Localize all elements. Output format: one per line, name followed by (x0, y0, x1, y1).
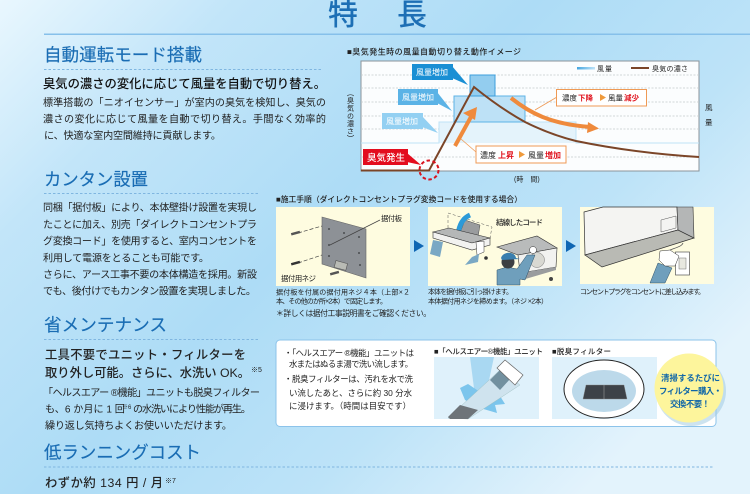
text block: easy maintenance: も、6 か月に 1 回 (45, 404, 125, 416)
text block: easy installation: グ変換コード」を使用すると、室内コンセントを (43, 234, 257, 248)
step arrow (414, 240, 424, 252)
text block: easy installation: でも、後付けでもカンタン設置を実現しました。 (43, 284, 256, 298)
label: concentration rises: 風量 (528, 151, 544, 160)
text block: auto mode: 標準搭載の「ニオイセンサー」が室内の臭気を検知し、臭気の (43, 96, 326, 109)
step 1 illustration (276, 207, 410, 286)
callout: no replacement: 交換不要！ (670, 399, 710, 409)
filter illustration (552, 346, 657, 419)
axis label: left: (臭気の濃さ) (346, 94, 354, 138)
panel text: 水またはぬるま湯で洗い流します。 (289, 359, 413, 369)
label: airflow up 2: 風量増加 (402, 92, 434, 102)
axis label: right: 風 (705, 103, 713, 112)
step 2 caption (428, 287, 548, 306)
title (44, 0, 750, 35)
panel text: に浸けます。（時間は目安です） (289, 401, 411, 411)
text block: easy maintenance: の水洗いにより性能が再生。 (133, 402, 251, 416)
step 1 caption: 据付板を付属の据付用ネジ４本（上部×２ (276, 288, 410, 296)
legend: 臭気の濃さ (652, 64, 688, 73)
heading: low running cost: 低ランニングコスト (44, 442, 201, 462)
text block: auto mode: に、快適な室内空間維持に貢献します。 (44, 129, 221, 142)
text block: easy maintenance (43, 348, 262, 432)
step 2 illustration (428, 207, 562, 286)
unit illustration: ■「ヘルスエアー®機能」ユニット (434, 346, 543, 356)
heading: easy installation: カンタン設置 (44, 170, 148, 190)
panel text: ・「ヘルスエアー ®機能」ユニットは (284, 348, 414, 358)
note: ＊詳しくは据付工事説明書をご確認ください。 (276, 308, 431, 318)
label: concentration rises: 上昇 (498, 150, 514, 160)
orange arrow down (511, 98, 590, 127)
label: concentration falls: 下降 (578, 92, 593, 102)
text block: easy installation: 利用して電源をとることも可能です。 (43, 252, 209, 264)
axis label: right (705, 103, 713, 127)
text block: auto mode: 濃さの変化に応じて風量を自動で切り替え。手間なく効率的 (43, 112, 326, 126)
chart plot panel (361, 61, 699, 171)
label: airflow up 3 (412, 64, 468, 85)
step 2 caption: 本体据付用ネジを締めます。（ネジ ×2本） (428, 296, 548, 306)
step 2 illustration: 結線したコード (496, 217, 543, 227)
axis label: time: (時 間) (514, 176, 540, 184)
chart: airflow switching (346, 46, 713, 184)
orange arrow up (455, 115, 472, 146)
unit illustration (434, 346, 543, 419)
text block: easy installation (43, 201, 257, 298)
step arrow (566, 240, 576, 252)
odor start marker (420, 160, 438, 180)
text block: easy maintenance: 繰り返し気持ちよくお使いいただけます。 (45, 419, 232, 432)
text block: cost: わずか約 134 円 / 月 (45, 475, 163, 490)
text block: easy maintenance: ※5 (251, 366, 262, 374)
step 1 illustration: 据付板 (381, 213, 402, 223)
label: airflow up 3: 風量増加 (416, 67, 448, 77)
maintenance panel (276, 340, 726, 426)
heading: auto mode: 自動運転モード搭載 (44, 45, 202, 65)
text block: easy installation: さらに、アース工事不要の本体構造を採用。新設 (43, 268, 257, 281)
steps heading: ■施工手順（ダイレクトコンセントプラグ変換コードを使用する場合） (276, 194, 522, 204)
chart title: ■臭気発生時の風量自動切り替え動作イメージ (347, 46, 521, 56)
step 1 caption (276, 288, 410, 306)
text block: auto mode: 臭気の濃さの変化に応じて風量を自動で切り替え。 (43, 76, 326, 91)
text block: easy maintenance: 工具不要でユニット・フィルターを (45, 348, 246, 362)
label: concentration falls: 減少 (624, 92, 639, 102)
odor concentration curve (361, 87, 699, 170)
label: concentration rises: 増加 (545, 150, 561, 160)
axis label: right: 量 (705, 118, 713, 127)
label: concentration falls: 風量 (608, 94, 623, 102)
label: odor occurs (363, 149, 421, 165)
text block: easy installation: たことに加え、別売「ダイレクトコンセントプラ (43, 218, 257, 231)
text block: easy maintenance: 「ヘルスエアー ®機能」ユニットも脱臭フィルター (43, 386, 260, 399)
text block: cost: ※7 (165, 477, 176, 485)
label: odor occurs: 臭気発生 (367, 152, 406, 164)
panel text: ・脱臭フィルターは、汚れを水で洗 (284, 374, 414, 384)
text block: auto mode (43, 76, 326, 142)
step 3 illustration (580, 207, 714, 284)
text block: easy maintenance: ※6 (122, 404, 132, 411)
label: airflow up 1 (382, 113, 438, 133)
heading: easy maintenance: 省メンテナンス (44, 315, 167, 335)
panel text: い流したあと、さらに約 30 分水 (289, 388, 413, 398)
filter illustration: ■脱臭フィルター (552, 346, 611, 356)
label: airflow up 2 (398, 89, 452, 111)
legend: 風量 (597, 65, 612, 73)
step 1 illustration: 据付用ネジ (281, 273, 316, 283)
step 1 caption: 本、その他のか所×2本）で固定します。 (276, 296, 387, 306)
callout: no replacement: 清掃するたびに (661, 373, 720, 383)
callout: no replacement (654, 354, 726, 426)
installation steps (276, 194, 714, 318)
panel text (284, 348, 414, 411)
label: concentration falls: 濃度 (562, 92, 577, 102)
label: concentration falls (535, 90, 646, 110)
text block: easy maintenance: 取り外し可能。さらに、水洗い OK。 (45, 365, 250, 380)
step 2 caption: 本体を据付板に引っ掛けます。 (428, 287, 513, 296)
label: concentration rises (461, 139, 566, 163)
label: airflow up 1: 風量増加 (386, 116, 418, 126)
legend (577, 64, 688, 73)
text block: easy installation: 同梱「据付板」により、本体壁掛け設置を実現し (43, 201, 257, 214)
label: concentration rises: 濃度 (480, 150, 496, 160)
step 3 caption: コンセントプラグをコンセントに差し込みます。 (580, 287, 705, 296)
airflow steps (361, 75, 699, 143)
callout: no replacement: フィルター購入・ (659, 386, 722, 396)
